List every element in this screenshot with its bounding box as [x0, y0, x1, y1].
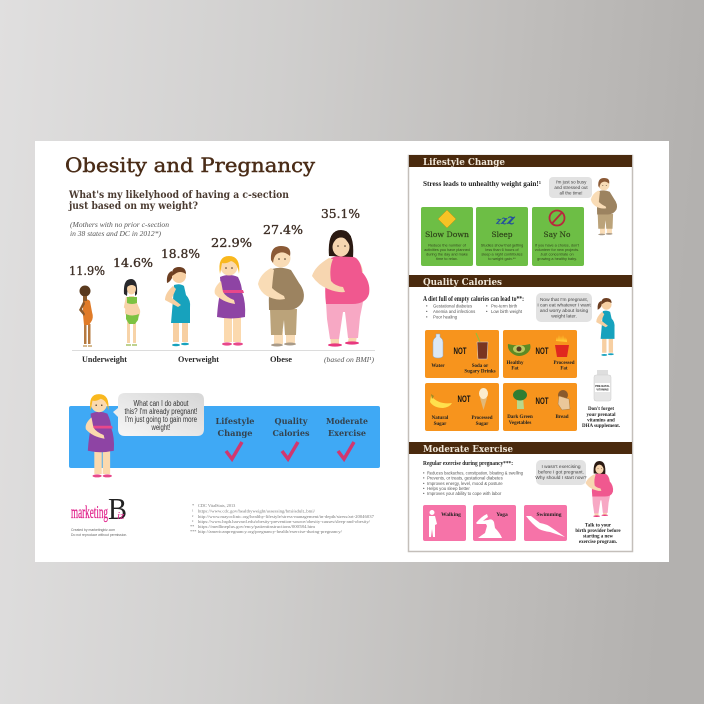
references: ³ — [192, 519, 194, 524]
card: natural sugar not processed sugar: NOT — [458, 394, 471, 405]
exercise heading: Regular exercise during pregnancy***: — [423, 460, 513, 467]
banner labels — [216, 417, 369, 439]
icon: vitamin bottle: PRE-NATAL — [595, 384, 610, 388]
card: slow down: during the day and make — [426, 252, 468, 256]
figure: teal mother — [596, 298, 615, 356]
card: greens not bread: NOT — [536, 396, 549, 407]
baseline — [72, 350, 375, 352]
speech bubble: What can I do about — [134, 399, 189, 408]
header: quality calories: Quality Calories — [423, 278, 502, 288]
exercise benefits list: • — [423, 486, 425, 491]
risk list: Low birth weight — [491, 309, 523, 314]
bubble: exercise: Why should I start now? — [535, 475, 587, 481]
card: healthy fat not processed fat: Processed — [553, 361, 575, 366]
references: *** — [190, 529, 196, 534]
card: walking: Walking — [441, 512, 461, 518]
card: yoga — [473, 505, 516, 541]
header: moderate exercise — [409, 442, 632, 455]
card: slow down: time to relax. — [436, 257, 458, 261]
logo: B — [108, 491, 127, 526]
exercise benefits list: Helps you sleep better — [427, 486, 470, 491]
card: greens not bread — [503, 383, 577, 431]
percent values: 35.1% — [321, 206, 360, 221]
references: ** — [190, 524, 194, 529]
card: swimming — [524, 505, 567, 541]
bubble: eat: weight later. — [551, 314, 577, 320]
references: https://www.cdc.gov/healthyweight/assessing/bmi/adult_bmi/ — [198, 508, 316, 514]
bubble: eat: and worry about losing — [540, 308, 588, 314]
references: https://medlineplus.gov/ency/patientinstructions/000584.htm — [198, 524, 316, 529]
vitamin reminder: your prenatal — [586, 413, 616, 418]
bubble: stress: all the time! — [559, 190, 583, 196]
figure: pink mother — [586, 461, 613, 517]
risk list: • — [486, 304, 488, 308]
card: greens not bread: Bread — [556, 415, 569, 420]
banner labels: Lifestyle — [216, 417, 255, 427]
card: sleep: Studies show that getting — [481, 244, 523, 248]
data note: (Mothers with no prior c-section — [70, 220, 169, 229]
exercise benefits list: • — [423, 481, 425, 486]
references: https://www.hsph.harvard.edu/obesity-prevention-source/obesity-causes/sleep-and-obesity/ — [198, 519, 371, 524]
title: Obesity and Pregnancy — [65, 153, 316, 177]
card: walking — [423, 505, 466, 541]
references: CDC VitalStats, 2013 — [198, 503, 235, 509]
card: healthy fat not processed fat — [503, 330, 577, 378]
bubble: exercise: before I got pregnant. — [538, 470, 584, 476]
percent values — [69, 206, 360, 278]
risk list: Anemia and infections — [433, 309, 475, 314]
percent values: 22.9% — [211, 235, 252, 250]
category labels: Underweight — [82, 355, 127, 364]
figure: brown mother — [591, 178, 617, 235]
risk list: • — [426, 314, 428, 320]
header: quality calories — [409, 275, 632, 288]
bubble: exercise — [535, 460, 587, 485]
icon: vitamin bottle — [594, 370, 611, 401]
bubble: eat: Now that I'm pregnant, — [540, 297, 588, 303]
card: say no: Just concentrate on — [540, 252, 574, 256]
card: healthy fat not processed fat: Fat — [560, 366, 568, 372]
card: say no: growing a healthy baby. — [537, 257, 577, 261]
card: sleep — [476, 207, 528, 266]
card: sleep: z — [495, 217, 502, 227]
credit — [71, 528, 127, 537]
bubble: eat: I can eat whatever I want — [537, 302, 591, 308]
header: lifestyle change: Lifestyle Change — [423, 158, 505, 168]
percent values: 27.4% — [263, 222, 303, 237]
subtitle question: What's my likelyhood of having a c-section — [68, 190, 290, 201]
risk list: • — [426, 309, 428, 314]
exercise benefits list — [423, 470, 524, 496]
stress heading: Stress leads to unhealthy weight gain!¹ — [423, 179, 541, 188]
header: lifestyle change — [409, 155, 632, 168]
card: natural sugar not processed sugar: Sugar — [434, 422, 447, 427]
credit: Created by marketingbiz.com — [71, 528, 115, 532]
bubble: exercise: I wasn't exercising — [541, 464, 581, 470]
references — [190, 503, 375, 534]
vitamin reminder: Don't forget — [588, 407, 614, 412]
references: ² — [192, 514, 194, 519]
card: natural sugar not processed sugar: Processed — [471, 416, 493, 421]
risk list: Gestational diabetes — [433, 304, 472, 308]
risk list: Poor healing — [433, 314, 458, 320]
header: moderate exercise: Moderate Exercise — [423, 445, 513, 455]
card: slow down: Slow Down — [425, 230, 469, 239]
risk list: • — [486, 309, 488, 314]
risk list: • — [426, 304, 428, 308]
percent values: 18.8% — [161, 246, 200, 261]
card: greens not bread: Vegetables — [509, 421, 531, 426]
exercise benefits list: Improves energy, level, mood & posture — [427, 481, 503, 486]
panel: white poster — [35, 141, 669, 562]
card: water not soda: Water — [431, 364, 445, 369]
exercise benefits list: Prevents, or treats, gestational diabetes — [427, 476, 503, 480]
card: water not soda — [425, 330, 499, 378]
banner labels: Exercise — [328, 429, 367, 439]
data note — [70, 220, 169, 238]
figure: obese 1 — [258, 246, 304, 346]
card: water not soda: NOT — [454, 346, 467, 357]
card: sleep: less than 6 hours of — [485, 248, 520, 252]
card: say no — [532, 207, 584, 266]
icon: vitamin bottle: VITAMINS — [596, 388, 609, 392]
exercise benefits list: Reduces backaches, constipation, bloating & swelling — [427, 470, 524, 476]
figure: underweight 1 — [79, 286, 93, 346]
panel: blue action banner — [69, 406, 380, 468]
references: http://www.mayoclinic.org/healthy-lifestyle/stress-management/in-depth/stress/art-20046037 — [198, 514, 375, 519]
bubble: stress: I'm just so busy — [556, 180, 587, 184]
exercise benefits list: • — [423, 491, 425, 496]
card: natural sugar not processed sugar — [425, 383, 499, 431]
card: healthy fat not processed fat: Fat — [511, 366, 519, 372]
data note: in 38 states and DC in 2012*) — [70, 229, 162, 238]
check marks — [226, 442, 354, 459]
banner labels: Calories — [272, 429, 310, 439]
exercise benefits list: • — [423, 470, 425, 476]
card: sleep: to weight gain.** — [488, 257, 516, 261]
vitamin reminder: DHA supplement. — [582, 424, 621, 429]
card: say no: If you have a choice, don't — [535, 244, 580, 248]
card: slow down: activities you have planned — [424, 248, 470, 252]
references: ¹ — [192, 508, 194, 514]
category labels — [82, 355, 374, 364]
figure: purple mother — [86, 394, 114, 477]
category labels: Overweight — [178, 355, 219, 364]
figure: overweight 2 — [215, 256, 245, 346]
card: yoga: Yoga — [496, 512, 508, 518]
credit: Do not reproduce without permission. — [71, 533, 127, 537]
category labels: (based on BMI¹) — [324, 355, 374, 364]
banner labels: Moderate — [326, 417, 369, 427]
vitamin reminder — [582, 407, 621, 429]
banner labels: Change — [218, 429, 253, 439]
logo: iz — [117, 510, 125, 522]
subtitle question — [68, 190, 290, 212]
card: water not soda: Soda or — [472, 364, 489, 369]
logo — [71, 491, 127, 526]
card: sleep: sleep a night contributes — [481, 252, 523, 256]
figure: overweight 1 — [165, 267, 190, 346]
speech bubble: this? I'm already pregnant! — [124, 407, 198, 416]
card: healthy fat not processed fat: NOT — [536, 346, 549, 357]
banner labels: Quality — [274, 417, 309, 427]
card: slow down: Reduce the number of — [428, 244, 467, 248]
card: water not soda: Sugary Drinks — [464, 370, 496, 374]
empty calories heading: A diet full of empty calories can lead to**: — [423, 296, 524, 303]
bubble: stress — [549, 177, 592, 198]
risk list: Pre-term birth — [491, 304, 518, 308]
bubble: eat — [536, 293, 592, 322]
speech bubble: weight! — [151, 423, 170, 432]
references: * — [192, 503, 194, 508]
card: sleep: z — [500, 214, 508, 227]
card: greens not bread: Dark Green — [507, 415, 533, 420]
panel: right column — [408, 156, 632, 552]
subtitle question: just based on my weight? — [68, 201, 198, 212]
card: say no: volunteer for new projects. — [535, 248, 579, 252]
percent values: 11.9% — [69, 263, 105, 278]
card: swimming: Swimming — [536, 512, 562, 518]
speech bubble: I'm just going to gain more — [125, 415, 197, 424]
risk list — [426, 304, 523, 320]
exercise benefits list: Improves your ability to cope with labor — [427, 491, 502, 496]
card: sleep: Sleep — [492, 230, 513, 239]
exercise benefits list: • — [423, 476, 425, 480]
provider reminder — [575, 524, 621, 545]
bubble: stress: and stressed out — [554, 185, 588, 190]
references: http://americanpregnancy.org/pregnancy-health/exercise-during-pregnancy/ — [198, 529, 343, 534]
card: healthy fat not processed fat: Healthy — [507, 361, 524, 366]
category labels: Obese — [270, 355, 292, 364]
provider reminder: Talk to your — [585, 524, 612, 528]
figure: underweight 2 — [124, 279, 140, 345]
figure: obese 2 — [312, 230, 369, 347]
percent values: 14.6% — [113, 255, 153, 270]
logo: marketing — [71, 502, 108, 522]
card: sleep: z — [506, 212, 516, 228]
provider reminder: birth provider before — [575, 529, 621, 534]
card: slow down — [421, 207, 473, 266]
provider reminder: starting a new — [583, 534, 614, 540]
card: natural sugar not processed sugar: Natural — [432, 416, 449, 421]
card: say no: Say No — [544, 230, 571, 239]
provider reminder: exercise program. — [579, 540, 618, 545]
speech bubble — [113, 393, 204, 436]
vitamin reminder: vitamins and — [587, 418, 615, 424]
card: natural sugar not processed sugar: Sugar — [476, 422, 489, 427]
